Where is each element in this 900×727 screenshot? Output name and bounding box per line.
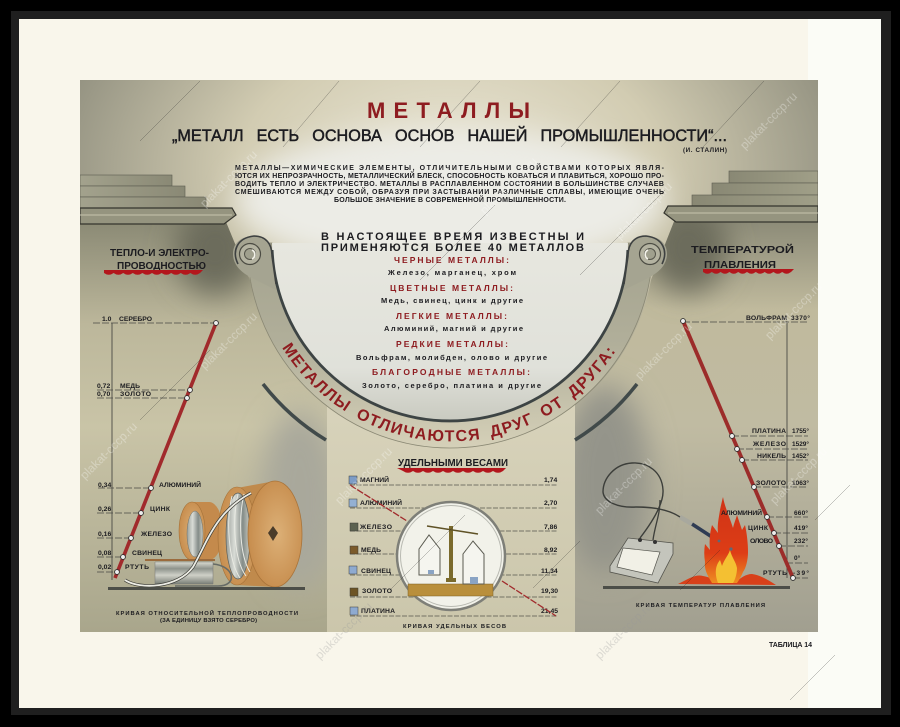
watermarks: plakat-cccp.ru [197,309,260,372]
noble metals [362,367,541,390]
data points [681,319,795,580]
caption: (ЗА ЕДИНИЦУ ВЗЯТО СЕРЕБРО) [160,618,257,624]
row lines [350,485,558,616]
right heading: ПЛАВЛЕНИЯ [704,259,776,271]
dark arc left [263,384,326,440]
left heading: ТЕПЛО-И ЭЛЕКТРО- [110,247,209,259]
balance scale in circle [397,502,505,610]
guide lines [683,322,808,578]
metal names: АЛЮМИНИЙ [360,498,402,507]
metal values: 19,30 [541,588,558,595]
curve [683,321,793,578]
metal values: 8,92 [544,547,557,554]
curve [115,323,216,578]
right chart: melting points [603,314,810,609]
arch band [247,243,653,448]
value labels: 0,72 [97,383,110,390]
value labels: 0,70 [97,391,110,398]
value labels: СВИНЕЦ [132,550,162,557]
value labels: ЦИНК [150,506,171,513]
baseline [108,587,305,590]
melting labels: 660° [794,509,808,517]
top light glow [235,130,665,270]
dark arc right [575,384,637,440]
baseline [603,586,790,589]
watermarks: plakat-cccp.ru [592,599,655,662]
right column body [560,203,818,632]
right stepped base [664,171,818,222]
melting labels: 1755° [792,427,809,435]
metal names: ПЛАТИНА [361,608,395,615]
right scroll [624,235,667,284]
axis [786,321,788,578]
light metals: ЛЕГКИЕ МЕТАЛЛЫ: [396,311,507,321]
watermarks: plakat-cccp.ru [632,319,695,382]
noble metals: БЛАГОРОДНЫЕ МЕТАЛЛЫ: [372,367,530,377]
metal values: 7,86 [544,524,557,531]
paper right margin [808,19,881,708]
black metals: ЧЕРНЫЕ МЕТАЛЛЫ: [394,255,509,265]
metal values: 2,70 [544,500,557,507]
value labels: РТУТЬ [125,564,149,571]
centre chart: specific weights [349,458,558,630]
melting labels: ЗОЛОТО [756,480,786,487]
icon: big spool [218,481,302,587]
guide lines [93,323,216,572]
right heading [691,243,794,274]
bowl [272,243,628,421]
watermarks: plakat-cccp.ru [612,179,675,242]
icon: wire coil [125,493,251,586]
metal names: ЗОЛОТО [362,588,392,595]
left heading [104,247,209,275]
panel background [80,80,818,405]
left chart: thermal conductivity [93,316,305,624]
icon: galvanometer with cable [603,463,712,583]
melting labels: ОЛОВО [750,538,773,545]
watermarks: plakat-cccp.ru [737,89,800,152]
value labels: 0,02 [98,564,111,571]
bowl heading [321,231,584,254]
red dashed curve [350,485,556,616]
value labels: 0,08 [98,550,111,557]
watermark lines [140,81,850,700]
metal values: 11,34 [541,568,558,575]
poster panel [80,80,818,632]
intro paragraph: СМЕШИВАЮТСЯ МЕЖДУ СОБОЙ, ОБРАЗУЯ ПРИ ЗАСТЫВАНИИ РАЗЛИЧНЫЕ СПЛАВЫ, ИМЕЮЩИЕ ОЧЕНЬ [235,187,664,196]
melting labels: 232° [794,537,808,545]
value labels: ЖЕЛЕЗО [140,531,172,538]
watermarks: plakat-cccp.ru [197,147,260,210]
intro paragraph: МЕТАЛЛЫ—ХИМИЧЕСКИЕ ЭЛЕМЕНТЫ, ОТЛИЧИТЕЛЬНЫМИ СВОЙСТВАМИ КОТОРЫХ ЯВЛЯ- [235,163,665,172]
value labels: МЕДЬ [120,383,140,390]
metal values [541,477,558,615]
metal names: СВИНЕЦ [361,568,391,575]
value labels: СЕРЕБРО [119,316,152,323]
melting labels: РТУТЬ [763,570,787,577]
intro paragraph: БОЛЬШОЕ ЗНАЧЕНИЕ В СОВРЕМЕННОЙ ПРОМЫШЛЕННОСТИ. [334,195,566,204]
melting labels: 1529° [792,440,809,448]
left column body [80,205,340,632]
intro paragraph: ЮТСЯ ИХ НЕПРОЗРАЧНОСТЬ, МЕТАЛЛИЧЕСКИЙ БЛЕСК, СПОСОБНОСТЬ КОВАТЬСЯ И ПЛАВИТЬСЯ, ХОРОШО ПРО- [235,171,665,180]
value labels: 0,34 [98,482,111,489]
noble metals: Золото, серебро, платина и другие [362,381,541,390]
watermarks: plakat-cccp.ru [312,599,375,662]
quote: „МЕТАЛЛ ЕСТЬ ОСНОВА ОСНОВ НАШЕЙ ПРОМЫШЛЕННОСТИ“... [172,126,727,145]
title: МЕТАЛЛЫ [367,98,530,123]
caption [116,609,298,624]
bowl heading: ПРИМЕНЯЮТСЯ БОЛЕЕ 40 МЕТАЛЛОВ [321,242,584,254]
melting labels: ЖЕЛЕЗО [752,441,786,448]
curved arch text: МЕТАЛЛЫ ОТЛИЧАЮТСЯ ДРУГ ОТ ДРУГА: [282,342,615,442]
icon: flame [678,497,776,585]
melting labels: 1452° [792,452,809,460]
melting labels: 3370° [791,314,810,322]
melting labels: АЛЮМИНИЙ [721,508,762,517]
left stepped base [80,175,236,224]
black metals [387,255,516,277]
bowl rim [272,250,628,421]
value labels: 1.0 [102,316,112,323]
caption: КРИВАЯ ТЕМПЕРАТУР ПЛАВЛЕНИЯ [636,603,765,609]
bowl heading: В НАСТОЯЩЕЕ ВРЕМЯ ИЗВЕСТНЫ И [321,231,584,243]
watermarks: plakat-cccp.ru [77,419,140,482]
right heading: ТЕМПЕРАТУРОЙ [691,243,794,256]
intro paragraph: ВОДИТЬ ТЕПЛО И ЭЛЕКТРИЧЕСТВО. МЕТАЛЛЫ В РАСПЛАВЛЕННОМ СОСТОЯНИИ В БОЛЬШИНСТВЕ СЛУЧАЕВ [235,181,664,188]
caption: КРИВАЯ УДЕЛЬНЫХ ВЕСОВ [403,624,506,630]
melting labels [721,314,810,577]
melting labels: 1063° [792,479,809,487]
melting labels: ВОЛЬФРАМ [746,315,787,322]
watermarks [77,89,830,662]
non-ferrous metals: ЦВЕТНЫЕ МЕТАЛЛЫ: [390,283,513,293]
melting labels: ЦИНК [748,525,769,532]
watermarks: plakat-cccp.ru [762,279,825,342]
table number: ТАБЛИЦА 14 [769,642,812,649]
heading: УДЕЛЬНЫМИ ВЕСАМИ [398,458,508,469]
melting labels: 0° [794,554,801,562]
quote author: (И. СТАЛИН) [683,147,727,154]
melting labels: -39° [793,569,809,577]
metal names: ЖЕЛЕЗО [359,524,392,531]
metal names: МЕДЬ [361,547,381,554]
melting labels: 419° [794,524,808,532]
central lower panel [327,400,575,632]
watermarks: plakat-cccp.ru [477,154,540,217]
value labels: АЛЮМИНИЙ [159,480,201,489]
light metals [384,311,523,333]
spools illustration [125,481,302,587]
metal names: МАГНИЙ [360,475,389,484]
value labels: ЗОЛОТО [120,391,151,398]
caption: КРИВАЯ ОТНОСИТЕЛЬНОЙ ТЕПЛОПРОВОДНОСТИ [116,609,298,617]
rare metals: РЕДКИЕ МЕТАЛЛЫ: [396,339,508,349]
rare metals: Вольфрам, молибден, олово и другие [356,353,547,362]
intro paragraph [235,163,665,204]
metal cubes [349,476,358,615]
left heading: ПРОВОДНОСТЬЮ [117,260,206,272]
data points [115,321,218,574]
melting labels: НИКЕЛЬ [757,453,786,460]
left scroll [233,235,276,284]
non-ferrous metals [381,283,523,305]
value labels: 0,26 [98,506,111,513]
icon: back spool [179,502,223,560]
black metals: Железо, марганец, хром [387,268,516,277]
non-ferrous metals: Медь, свинец, цинк и другие [381,296,523,305]
metal names [359,475,402,615]
rare metals [356,339,547,362]
value labels [97,316,201,571]
watermarks: plakat-cccp.ru [332,444,395,507]
axis [111,323,113,580]
light metals: Алюминий, магний и другие [384,324,523,333]
value labels: 0,16 [98,531,111,538]
watermarks: plakat-cccp.ru [767,444,830,507]
metal values: 1,74 [544,477,557,484]
melting labels: ПЛАТИНА [752,428,786,435]
metal values: 21,45 [541,608,558,615]
watermarks: plakat-cccp.ru [592,454,655,517]
